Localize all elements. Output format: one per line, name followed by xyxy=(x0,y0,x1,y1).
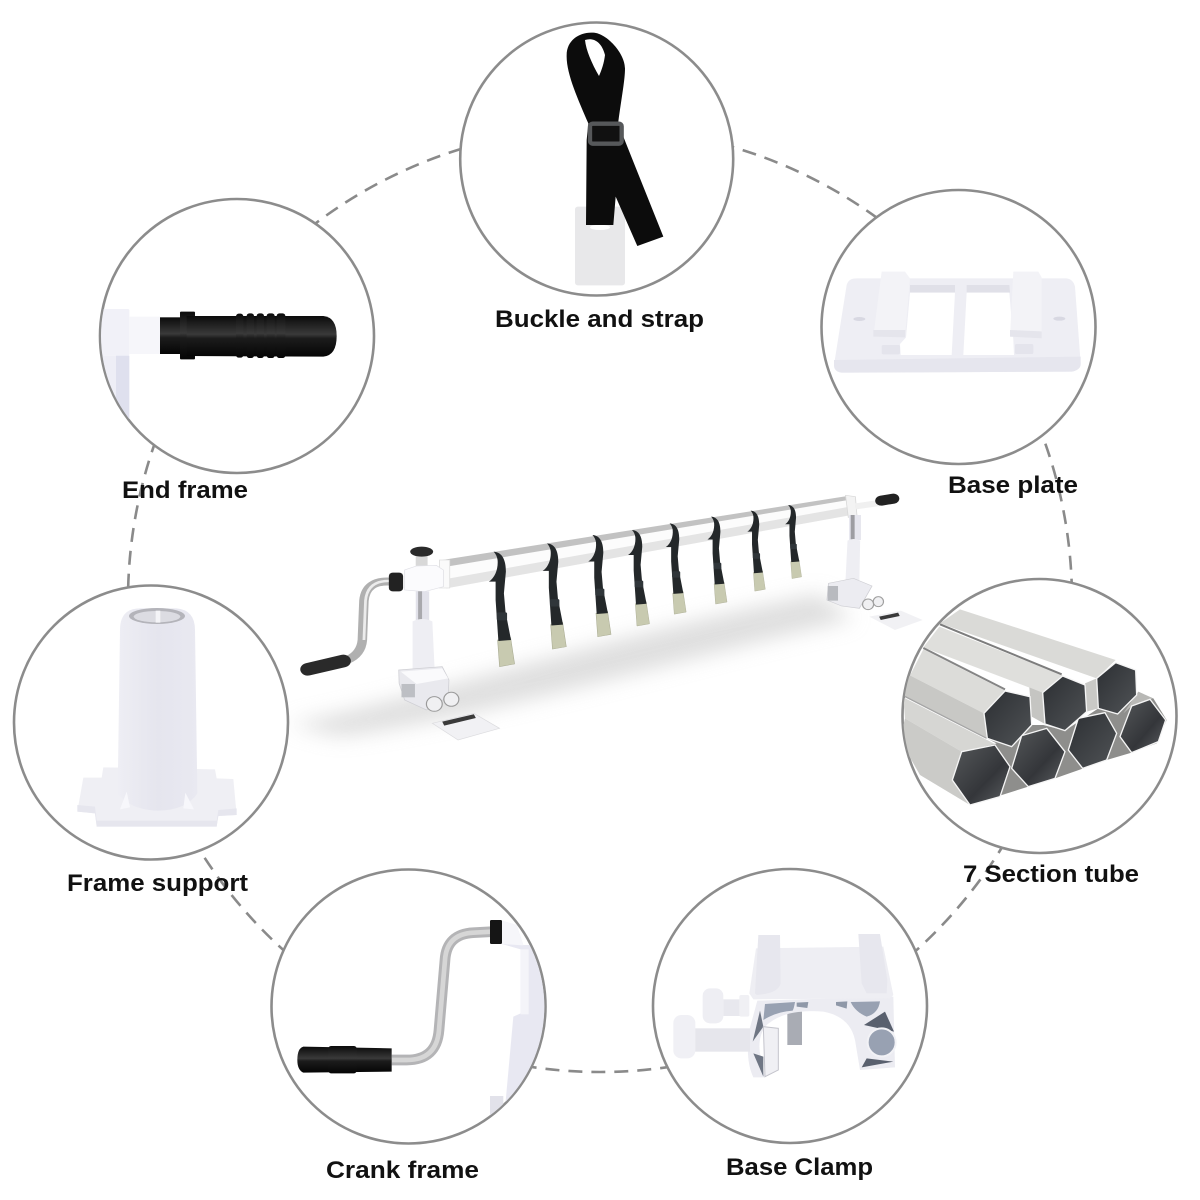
right support assembly xyxy=(827,499,923,630)
straps and tabs xyxy=(489,505,802,667)
label: 7 Section tube xyxy=(963,861,1139,888)
panel: base clamp xyxy=(653,869,927,1181)
left base plate xyxy=(432,713,500,740)
icon: strap with buckle and tab xyxy=(567,33,663,285)
panel: end frame xyxy=(100,199,374,504)
panel: base plate xyxy=(822,190,1096,499)
icon: hexagonal tube bundle xyxy=(900,609,1167,805)
floor shadow xyxy=(290,593,851,737)
left crank assembly xyxy=(308,547,459,711)
label: Buckle and strap xyxy=(495,306,704,333)
icon: frame support xyxy=(77,608,237,827)
dashed connector ring xyxy=(128,128,1072,1072)
label: Crank frame xyxy=(326,1157,479,1184)
icon: base plate xyxy=(834,272,1081,373)
panel: crank frame xyxy=(272,870,547,1184)
panel: buckle and strap xyxy=(460,22,733,333)
label: Base Clamp xyxy=(726,1154,873,1181)
icon: clamp xyxy=(673,934,896,1077)
label: End frame xyxy=(122,477,248,504)
icon: end frame handle xyxy=(100,309,337,419)
label: Base plate xyxy=(948,472,1078,499)
panel: 7 section tube xyxy=(900,579,1176,888)
label: Frame support xyxy=(67,870,248,897)
roller tube xyxy=(439,495,857,588)
panel: frame support xyxy=(14,586,288,897)
main product: pool cover reel xyxy=(290,495,923,740)
icon: crank handle xyxy=(297,920,547,1127)
